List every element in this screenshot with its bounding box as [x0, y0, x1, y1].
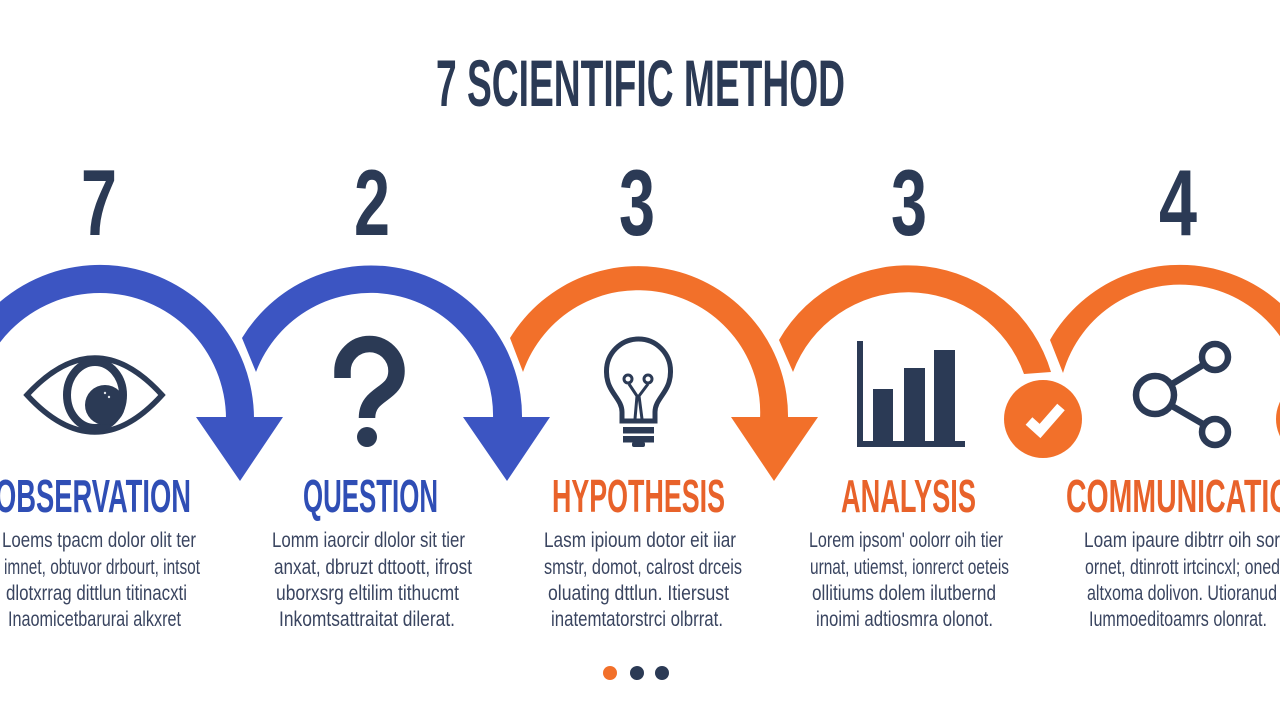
label: HYPOTHESIS: [552, 470, 725, 522]
description: inoimi adtiosmra olonot.: [816, 608, 993, 631]
description: Loems tpacm dolor olit ter: [2, 529, 196, 552]
description: oluating dttlun. Itiersust: [548, 582, 729, 605]
title: 7 SCIENTIFIC METHOD: [436, 46, 845, 120]
icon: share: [1136, 344, 1228, 445]
description: imnet, obtuvor drbourt, intsot: [4, 556, 200, 579]
description: Inaomicetbarurai alkxret: [8, 608, 181, 631]
step 5: communication: [1050, 150, 1280, 631]
pagination dots: [603, 666, 669, 680]
description: Lasm ipioum dotor eit iiar: [544, 529, 736, 552]
step number: 7: [81, 150, 117, 255]
icon: question mark: [342, 344, 396, 447]
description: [809, 529, 1009, 631]
description: anxat, dbruzt dttoott, ifrost: [274, 556, 472, 579]
step 1: observation: [0, 150, 283, 631]
step number: 3: [619, 150, 655, 255]
next step badge: [1276, 380, 1280, 458]
label: OBSERVATION: [0, 470, 191, 522]
icon: light bulb: [606, 339, 671, 447]
arrow arc: [242, 265, 550, 481]
step 3: hypothesis: [510, 150, 818, 631]
description: [544, 529, 742, 631]
label: ANALYSIS: [841, 470, 976, 522]
description: uborxsrg eltilim tithucmt: [276, 582, 459, 605]
icon: check badge: [1004, 380, 1082, 458]
icon: eye: [27, 358, 162, 432]
description: Inkomtsattraitat dilerat.: [279, 608, 455, 631]
label: QUESTION: [303, 470, 438, 522]
description: [1084, 529, 1280, 631]
description: Lorem ipsom' oolorr oih tier: [809, 529, 1003, 552]
description: Lomm iaorcir dlolor sit tier: [272, 529, 465, 552]
step number: 4: [1159, 150, 1197, 255]
description: dlotxrrag dittlun titinacxti: [6, 582, 187, 605]
arc: [779, 265, 1051, 374]
arrow arc: [510, 266, 818, 481]
description: [2, 529, 200, 631]
arrow arc: [0, 265, 283, 481]
step number: 2: [354, 150, 390, 255]
step 2: question: [242, 150, 550, 631]
arc: [1050, 265, 1280, 415]
description: smstr, domot, calrost drceis: [544, 556, 742, 579]
step 4: analysis: [779, 150, 1082, 631]
icon: bar chart: [857, 341, 965, 447]
description: inatemtatorstrci olbrrat.: [551, 608, 723, 631]
step number: 3: [891, 150, 927, 255]
description: [272, 529, 472, 631]
description: ollitiums dolem ilutbernd: [812, 582, 996, 605]
description: urnat, utiemst, ionrerct oeteis: [810, 556, 1009, 579]
